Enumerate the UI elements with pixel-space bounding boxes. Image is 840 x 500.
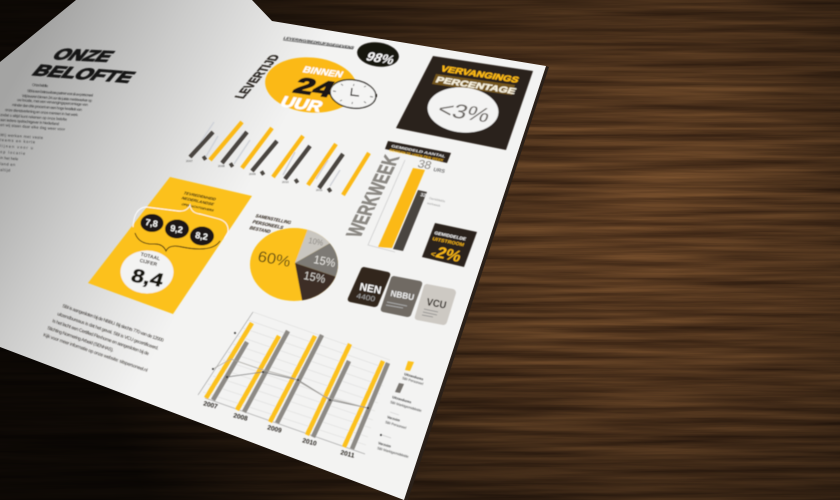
panel: vervangingspercentage: <3% [434, 98, 494, 127]
yellow circle: binnen 24 uur: BINNEN [301, 65, 345, 80]
bar chart: werkweek: 32 [419, 192, 427, 199]
bars [206, 323, 388, 449]
left page body text [0, 83, 93, 173]
grid [203, 312, 390, 445]
bar chart: werkweek: 38 [416, 158, 433, 172]
left page body text: aan iedere opdrachtgever in Nederland [0, 118, 59, 126]
logo: VCU [415, 284, 456, 325]
title: Onze belofte [28, 45, 140, 86]
line and bar chart 2007-2011 [198, 312, 424, 460]
panel: gemiddelde uitstroom 2%: UITSTROOM [431, 236, 465, 248]
bar chart: levertijd per jaar: 2010 [282, 180, 289, 184]
bar chart: levertijd per jaar: 2011 [316, 188, 323, 192]
bar chart: levertijd per jaar: 2008 [218, 164, 225, 168]
bar chart: levertijd per jaar: 2009 [249, 172, 256, 176]
panel: tevredenheid (yellow) [88, 177, 252, 314]
total score circle: CIJFER [139, 258, 158, 268]
total score circle: 8,4 [129, 265, 167, 291]
logo: NEN 4400: 4400 [356, 291, 376, 303]
panel: vervangingspercentage [396, 56, 533, 150]
left page body text: en wij staan daar elke dag weer voor [0, 123, 66, 132]
logo: NEN 4400: NEN [358, 281, 383, 297]
left page body text: Wij werken met vaste [0, 133, 43, 140]
legend: SBI Marktgemiddelde [390, 400, 422, 413]
logo: NBBU: NBBU [390, 288, 415, 302]
left page body text: lijnen voor u [0, 144, 33, 150]
pie chart: 15% [312, 252, 337, 270]
left page body text: SBI is een betrouwbare partner voor al uw personeel [27, 89, 93, 98]
panel: gemiddelde uitstroom 2% [422, 223, 477, 267]
legend: SBI Marktgemiddelde [377, 446, 409, 459]
bar chart: werkweek: werkweek [427, 201, 441, 208]
bar chart: werkweek: URS [432, 167, 446, 175]
heading: levertijd: LEVERTIJD [231, 54, 283, 100]
heading: samenstelling personeelsbestand [248, 214, 292, 235]
pie chart [249, 227, 339, 302]
left page body text: op locatie [0, 150, 25, 156]
legend: Uitzenduren [404, 372, 424, 381]
score circles: 9,2 [169, 223, 184, 235]
logo: VCU: VCU [425, 297, 447, 311]
icon: clock [328, 77, 378, 111]
paragraph text: Is het lacht een Certified Flexhome en aangesloten bij de [52, 318, 150, 356]
left page body text: onze dienstverlening en onze mensen in het werk [5, 108, 78, 117]
yellow circle: binnen 24 uur: 24 [289, 74, 340, 103]
legend: Verzuim [378, 441, 391, 449]
logo: NEN 4400 [348, 267, 390, 307]
year labels: 2011 [340, 449, 355, 460]
heading: samenstelling personeelsbestand: SAMENSTELLING [254, 214, 292, 226]
yellow circle: binnen 24 uur [263, 54, 359, 116]
pie chart: 10% [308, 235, 325, 248]
panel: vervangingspercentage: PERCENTAGE [434, 75, 518, 96]
legend [377, 361, 424, 459]
tag: gemiddeld aantal gewerkte uren per week: GEWERKTE UREN PER WEEK [389, 148, 444, 162]
tag: gemiddeld aantal gewerkte uren per week [385, 141, 451, 163]
left page body text: land en [0, 162, 15, 167]
year labels [202, 400, 355, 460]
left page body text: Wij leveren binnen 24 uur de juiste medewerker op [22, 94, 92, 103]
pie chart: 15% [302, 268, 327, 286]
paragraph text: SBI is aangesloten bij de NBBU. Bij slechts 770 van de 12000 [62, 303, 165, 343]
header tag: levering: LEVERING/BEDRIJFSGEGEVENS [282, 36, 356, 50]
heading: werkweek: WERKWEEK [342, 153, 404, 239]
badge: 98%: 98% [364, 50, 397, 67]
paragraph text: Stichting Normering Arbeid (SENHAS). [47, 325, 114, 353]
legend: SBI Personeel [402, 376, 424, 386]
bar chart: werkweek: Gemiddelde [429, 196, 446, 203]
left page body text: uw locatie, met een vervangingspercentage van [17, 98, 88, 107]
left page body text: altijd [0, 168, 10, 173]
title: Onze belofte: ONZE [48, 45, 119, 65]
yellow circle: binnen 24 uur: UUR [277, 93, 326, 115]
panel: gemiddelde uitstroom 2%: GEMIDDELDE [434, 230, 467, 241]
total score circle [120, 250, 174, 294]
brochure content [0, 36, 533, 460]
score circles: 7,8 [144, 217, 159, 229]
brochure paper [0, 0, 549, 500]
heading: samenstelling personeelsbestand: PERSONEELS [251, 220, 285, 231]
bar chart: levertijd per jaar: 2007 [186, 159, 193, 163]
left page body text: zodat u altijd kunt rekenen op onze belofte [0, 113, 67, 122]
paragraph text: Kijk voor meer informatie op onze website: sitspersoneel.nl [43, 332, 148, 373]
left page body text: Onze belofte [32, 83, 48, 88]
year labels: 2007 [202, 400, 219, 411]
logo: NBBU [381, 276, 422, 317]
legend: SBI Personeel [385, 420, 407, 430]
panel: gemiddelde uitstroom 2%: <2% [428, 243, 465, 265]
left page body text: in het hele [0, 156, 18, 161]
year labels: 2009 [266, 424, 283, 435]
heading: tevredenheid [180, 191, 217, 213]
total score circle: TOTAAL [140, 252, 161, 262]
heading: tevredenheid: NEDERLANDSE [180, 196, 216, 206]
heading: samenstelling personeelsbestand: BESTAND [248, 226, 272, 235]
heading: tevredenheid: TEVREDENHEID [182, 191, 217, 201]
year labels: 2010 [301, 437, 318, 448]
paragraph text: uitzendbureaus is dat het geval. SBI is VCU gecertificeerd. [57, 311, 159, 351]
badge: 98% [356, 40, 400, 69]
score circles [140, 214, 214, 246]
panel: vervangingspercentage: VERVANGINGS [439, 64, 521, 84]
heading: tevredenheid: OPDRACHTGEVERS [180, 203, 215, 213]
bar chart: levertijd per jaar [186, 122, 369, 195]
legend: Uitzenduren [392, 395, 412, 404]
title: Onze belofte: BELOFTE [28, 61, 140, 86]
left page body text: minder dan drie procent en een hoge kwaliteit van [12, 103, 82, 112]
tag: gemiddeld aantal gewerkte uren per week: GEMIDDELD AANTAL [391, 144, 447, 159]
lines [227, 372, 368, 408]
brace lines [133, 205, 228, 238]
paragraph text [43, 303, 165, 373]
left page body text: teams en korte [0, 138, 35, 144]
pie chart: 60% [256, 248, 292, 271]
score circles: 8,2 [194, 230, 209, 242]
legend: Verzuim [387, 415, 400, 423]
year labels: 2008 [232, 412, 249, 423]
bar chart: werkweek [368, 158, 446, 252]
